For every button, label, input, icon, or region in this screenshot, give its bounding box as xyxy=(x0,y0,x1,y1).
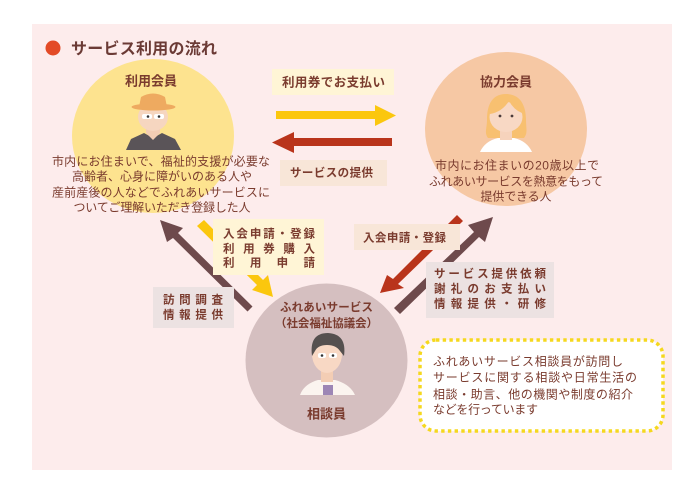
callout: counselor note: サービスに関する相談や日常生活の xyxy=(433,370,637,384)
user member description: 産前産後の人などでふれあいサービスに xyxy=(52,184,270,200)
icon: young woman xyxy=(480,94,532,152)
label: payment: 利用券でお支払い xyxy=(282,74,385,90)
panel: cooperating member xyxy=(425,52,603,206)
cooperating member description: ふれあいサービスを熱意をもって xyxy=(429,174,603,188)
counselor label: 相談員 xyxy=(307,406,346,422)
label: application: 入会申請・登録 xyxy=(363,230,446,244)
cooperating member heading: 協力会員 xyxy=(480,74,532,90)
arrow: brown to cooperating member xyxy=(394,217,493,314)
icon: elderly man with hat xyxy=(126,94,181,150)
label: visit survey: 訪問調査 xyxy=(163,292,224,306)
user member description: 高齢者、心身に障がいのある人や xyxy=(72,168,252,184)
arrow: yellow to service xyxy=(197,220,273,297)
callout: counselor note: などを行っています xyxy=(433,402,538,416)
callout: counselor note: ふれあいサービス相談員が訪問し xyxy=(433,354,623,368)
arrow: red to user member xyxy=(272,132,392,153)
label: visit survey xyxy=(153,287,234,328)
cooperating member description xyxy=(429,158,603,204)
panel: user member xyxy=(52,59,270,214)
user member heading: 利用会員 xyxy=(125,74,177,88)
arrow: red to service xyxy=(380,215,463,293)
label: application and purchase: 入会申請・登録 xyxy=(223,226,316,240)
label: service request: サービス提供依頼 xyxy=(434,266,546,280)
label: service request xyxy=(426,262,554,318)
cooperating member description: 提供できる人 xyxy=(480,188,552,204)
cooperating member description: 市内にお住まいの20歳以上で xyxy=(435,158,599,172)
callout: counselor note: 相談・助言、他の機関や制度の紹介 xyxy=(433,388,633,402)
label: application and purchase xyxy=(213,219,324,275)
label: application and purchase: 利用申請 xyxy=(223,256,316,270)
label: application and purchase: 利用券購入 xyxy=(223,242,316,256)
callout: counselor note xyxy=(420,340,663,431)
label: service provision: サービスの提供 xyxy=(290,166,374,180)
label: payment xyxy=(272,69,394,95)
label: service request: 謝礼のお支払い xyxy=(434,282,546,296)
label: visit survey: 情報提供 xyxy=(163,308,224,322)
label: application xyxy=(354,224,460,250)
user member description: ついてご理解いただき登録した人 xyxy=(74,200,250,214)
label: service request: 情報提供・研修 xyxy=(434,296,546,310)
icon: counselor xyxy=(300,333,355,395)
service heading xyxy=(275,300,378,330)
service heading: ふれあいサービス xyxy=(280,300,373,314)
arrow: yellow to cooperating member xyxy=(276,105,396,126)
panel: fureai service xyxy=(246,284,408,438)
arrow: brown to user member xyxy=(160,220,252,312)
service heading: （社会福祉協議会） xyxy=(275,316,378,330)
user member description: 市内にお住まいで、福祉的支援が必要な xyxy=(52,154,270,168)
label: service provision xyxy=(280,160,387,186)
user member description xyxy=(52,154,270,214)
title: サービス利用の流れ xyxy=(71,39,217,58)
